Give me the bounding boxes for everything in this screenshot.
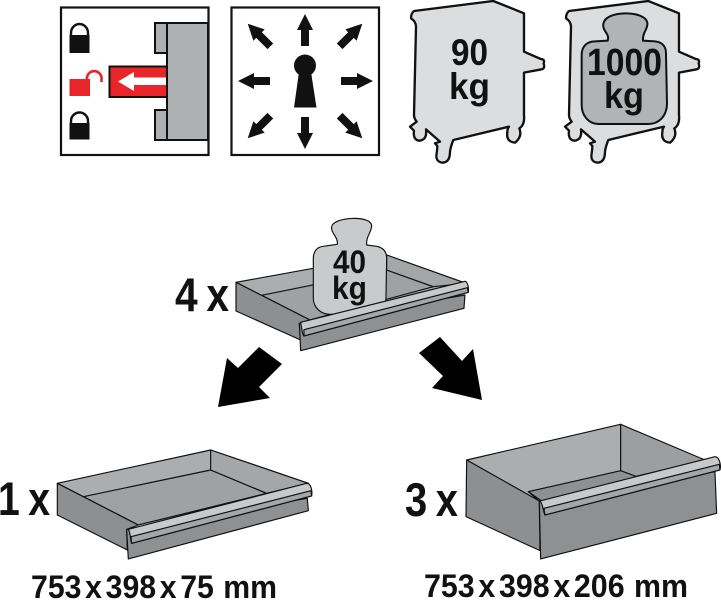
text: 40: 40	[333, 244, 366, 280]
panel: lock mechanism	[61, 8, 208, 155]
icon: open red padlock	[70, 71, 102, 96]
icon: deep drawer	[466, 424, 720, 559]
icon: drawer handle	[128, 483, 312, 543]
icon: low drawer	[57, 450, 312, 559]
icon: drawer handle	[301, 281, 468, 336]
icon: cabinet 1000 kg with weight	[565, 1, 699, 163]
arrow: down right	[419, 337, 482, 400]
icon: eight radial arrows	[238, 14, 373, 149]
icon: gray lock block	[155, 23, 208, 140]
icon: closed padlock bottom	[70, 112, 90, 140]
panel: keyhole with arrows	[232, 8, 379, 155]
arrow: down left	[218, 347, 282, 407]
text: kg: kg	[449, 66, 490, 107]
label: 3 x: 3 x	[405, 473, 458, 526]
icon: red bolt with arrow	[110, 66, 167, 97]
icon: keyhole	[294, 54, 316, 108]
text: 1000: 1000	[587, 42, 662, 84]
icon: cabinet 90 kg	[410, 1, 544, 163]
icon: weight	[582, 13, 667, 124]
icon: shallow drawer with 40 kg weight	[236, 218, 468, 351]
text: kg: kg	[604, 75, 644, 116]
label: 4 x: 4 x	[175, 268, 229, 321]
text: kg: kg	[332, 270, 367, 306]
icon: drawer handle	[540, 457, 720, 515]
icon: closed padlock top	[70, 24, 90, 53]
text: 90: 90	[451, 32, 488, 73]
icon: 40 kg weight	[313, 218, 387, 314]
